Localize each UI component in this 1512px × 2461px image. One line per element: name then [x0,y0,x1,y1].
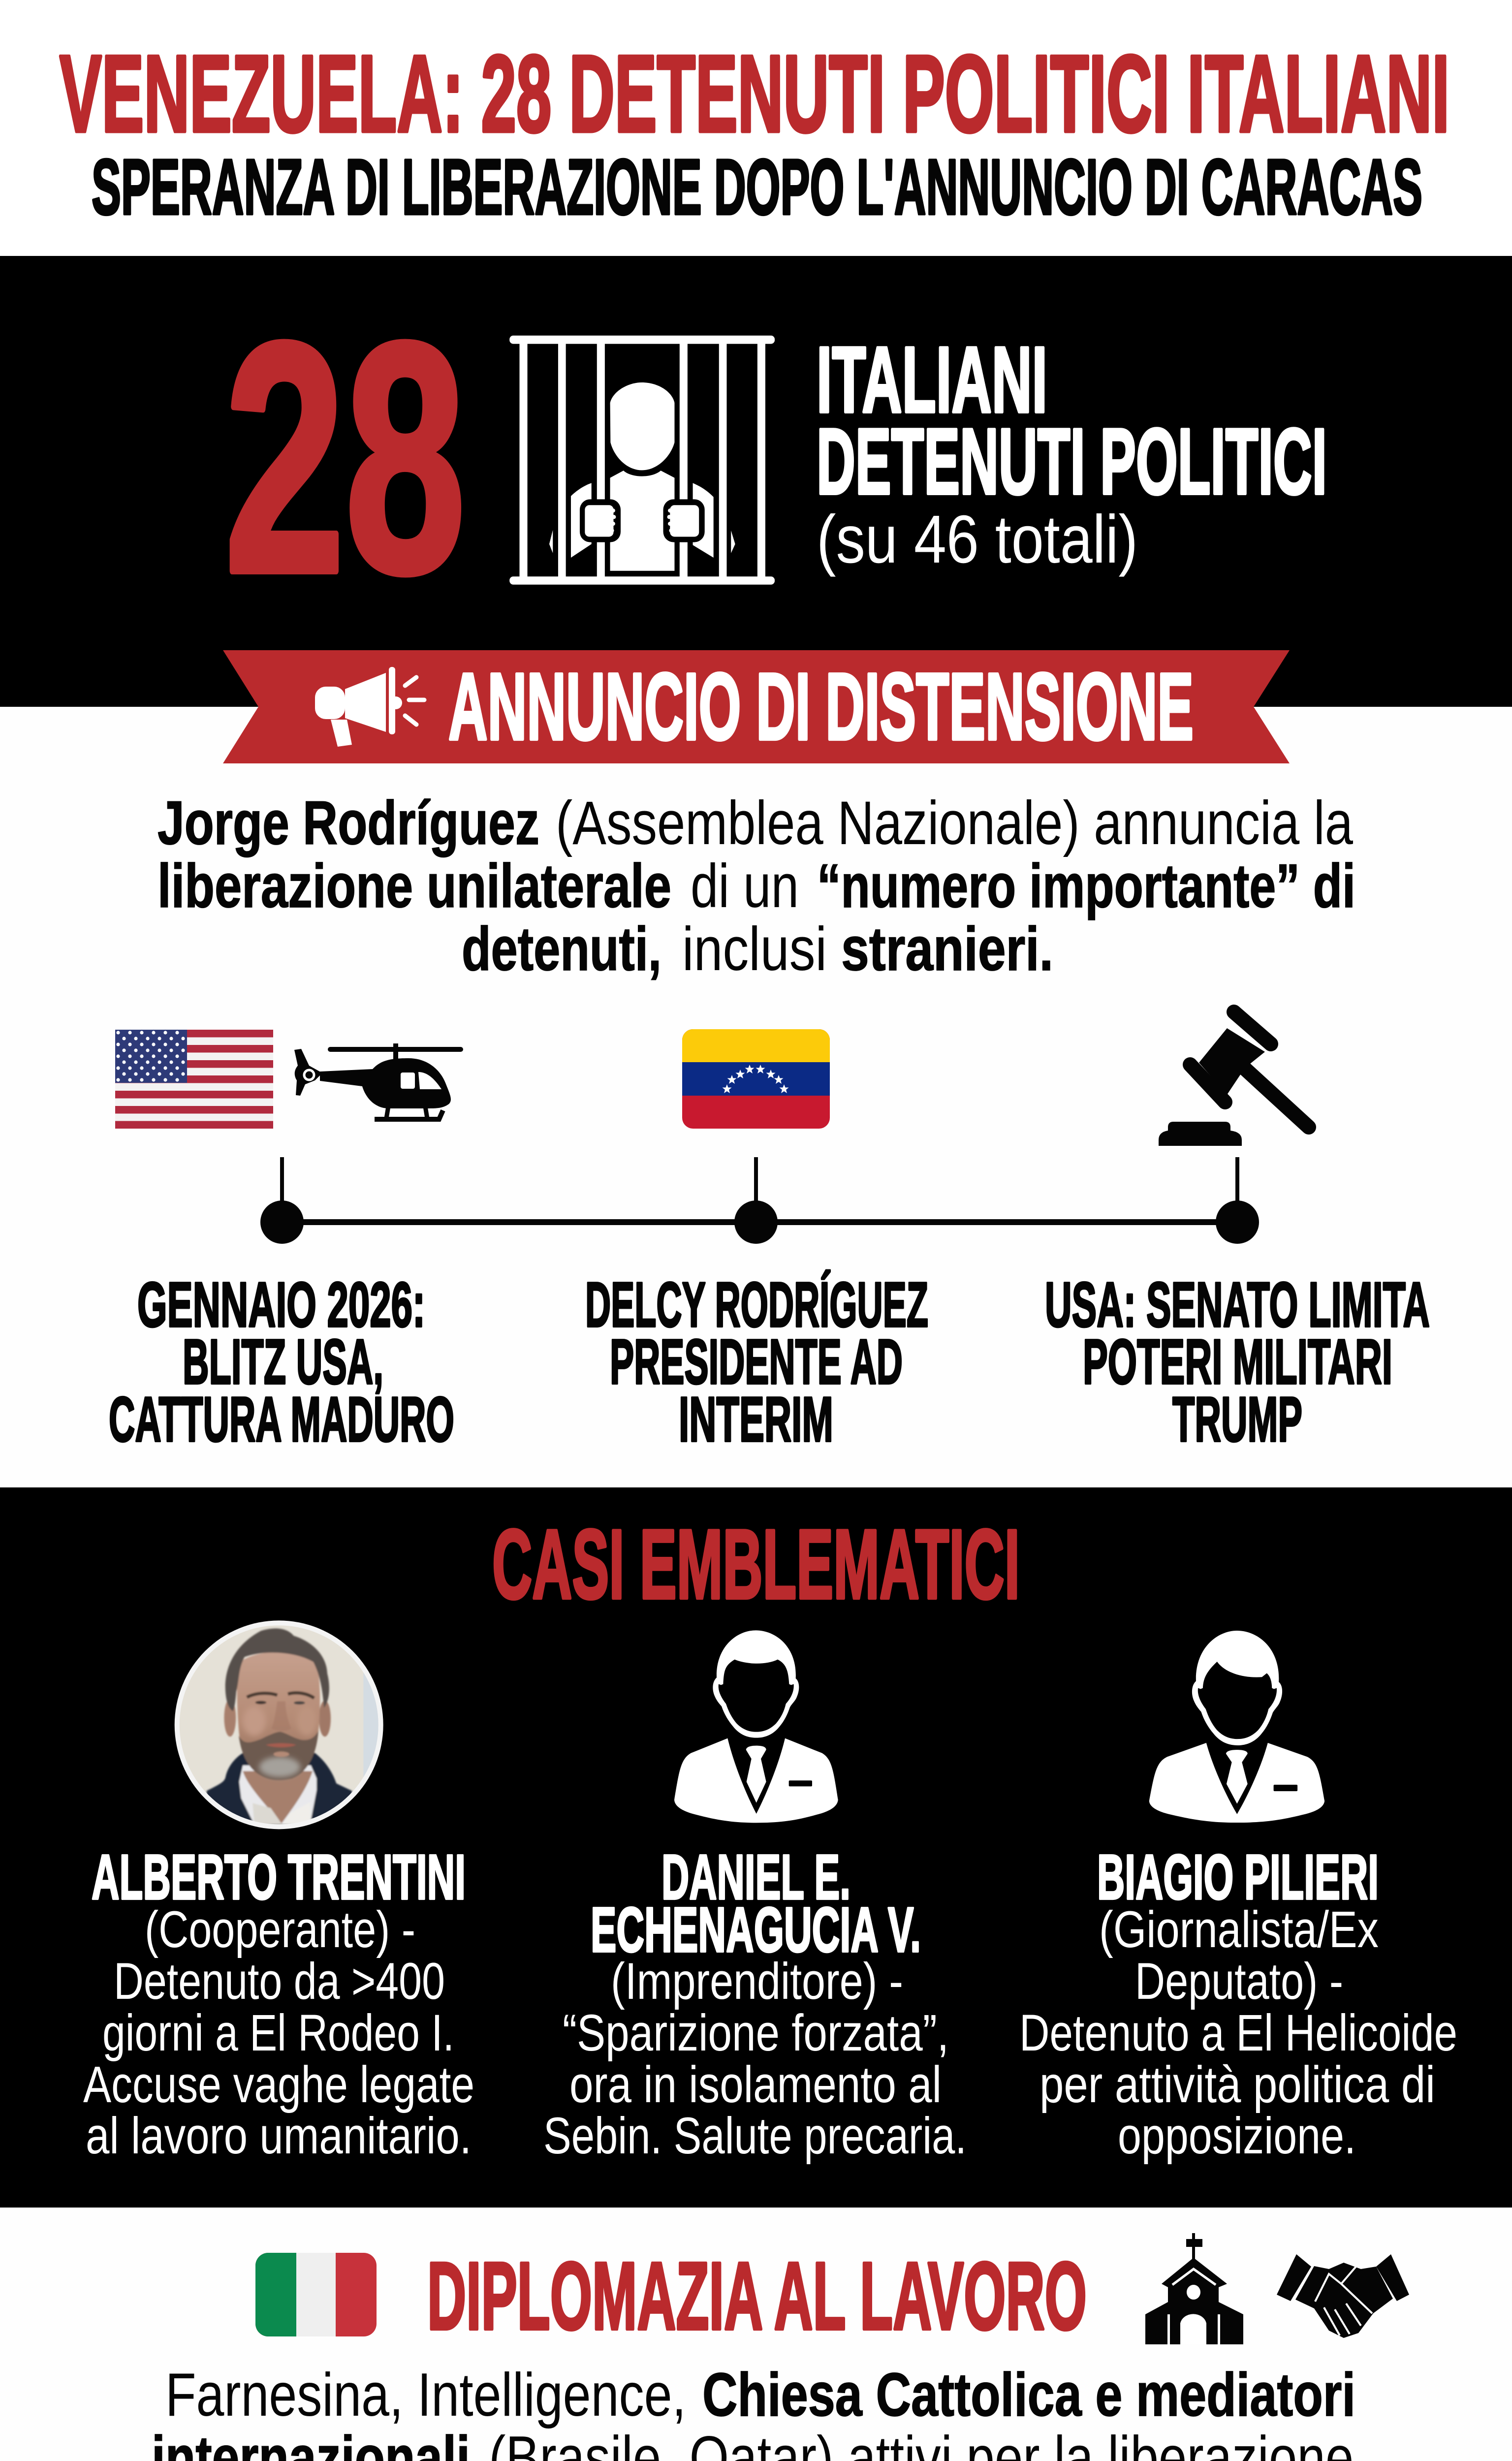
icon: businessman silhouette, Daniel Echenagucia [674,1630,838,1823]
timeline label: Delcy Rodríguez: INTERIM [679,1384,833,1455]
big number 28: 28 [224,275,466,640]
icon: Venezuela flag [682,1029,830,1129]
portrait: Alberto Trentini [174,1620,383,1829]
heading: casi emblematici: CASI EMBLEMATICI [492,1510,1020,1619]
timeline label: Delcy Rodríguez: DELCY RODRÍGUEZ [585,1269,928,1340]
section background: black cases area [0,1487,1512,2208]
case text: Alberto Trentini: (Cooperante) - [145,1901,415,1958]
stat label [817,328,1327,577]
section background: white diplomacy area [0,2208,1512,2461]
timeline label: gennaio 2026 [109,1269,454,1455]
icon: businessman silhouette, Biagio Pilieri [1149,1631,1324,1823]
diplomacy paragraph [152,2361,1368,2461]
icon: megaphone [315,667,424,747]
timeline label: gennaio 2026: BLITZ USA, [183,1326,383,1397]
timeline label: USA senato [1045,1269,1430,1455]
announcement paragraph: detenuti, [462,915,662,983]
stat label: (su 46 totali) [817,502,1138,577]
timeline label: USA senato: TRUMP [1172,1384,1302,1455]
timeline label: Delcy Rodríguez: PRESIDENTE AD [610,1326,903,1397]
announcement paragraph: “numero importante” di [817,852,1355,920]
case text: Daniel E. Echenagucia V.: “Sparizione forzata”, [563,2004,949,2062]
banner: annuncio di distensione [223,650,1290,763]
case text: Daniel E. Echenagucia V.: ECHENAGUCIA V. [591,1894,921,1965]
case text: Biagio Pilieri: Deputato) - [1135,1953,1343,2010]
timeline [260,1157,1259,1244]
case text: Daniel E. Echenagucia V. [543,1842,967,2165]
section background: black stat band [0,256,1512,707]
case text: Alberto Trentini: giorni a El Rodeo I. [102,2004,454,2062]
case text: Daniel E. Echenagucia V.: (Imprenditore) - [611,1953,903,2010]
announcement paragraph: Jorge Rodríguez [158,789,539,857]
diplomacy paragraph: Chiesa Cattolica e mediatori [702,2361,1355,2429]
case text: Alberto Trentini: ALBERTO TRENTINI [92,1842,466,1913]
case text: Alberto Trentini: Detenuto da >400 [114,1953,445,2010]
case text: Alberto Trentini [83,1842,474,2165]
announcement paragraph: stranieri. [841,915,1053,983]
icon: helicopter [294,1043,463,1119]
section background: header white [0,0,1512,256]
icon: handshake [1277,2254,1409,2338]
case text: Alberto Trentini: Accuse vaghe legate [83,2056,474,2114]
announcement paragraph [158,789,1355,983]
announcement paragraph: (Assemblea Nazionale) annuncia la [556,789,1353,857]
case text: Biagio Pilieri: per attività politica di [1040,2056,1435,2114]
case text: Daniel E. Echenagucia V.: DANIEL E. [662,1842,850,1913]
icon: USA flag [115,1030,273,1129]
timeline label: Delcy Rodríguez [585,1269,928,1455]
stat label: ITALIANI [817,328,1047,432]
icon: prisoner behind bars [509,336,775,585]
case text: Alberto Trentini: al lavoro umanitario. [86,2107,472,2165]
announcement paragraph: liberazione unilaterale [158,852,671,920]
case text: Biagio Pilieri: opposizione. [1118,2107,1356,2165]
timeline label: gennaio 2026: CATTURA MADURO [109,1384,454,1455]
case text: Biagio Pilieri: (Giornalista/Ex [1099,1901,1379,1958]
case text: Daniel E. Echenagucia V.: Sebin. Salute precaria. [543,2107,967,2165]
announcement paragraph: di un [691,852,799,920]
icon: gavel [1159,1012,1309,1146]
icon: Italian flag [255,2253,377,2336]
timeline label: gennaio 2026: GENNAIO 2026: [137,1269,425,1340]
section background: white timeline area [0,707,1512,1487]
announcement paragraph: inclusi [682,915,827,983]
case text: Biagio Pilieri [1019,1842,1457,2165]
case text: Daniel E. Echenagucia V.: ora in isolamento al [569,2056,942,2114]
diplomacy paragraph: Farnesina, Intelligence, [165,2361,686,2429]
icon: church [1145,2233,1243,2344]
